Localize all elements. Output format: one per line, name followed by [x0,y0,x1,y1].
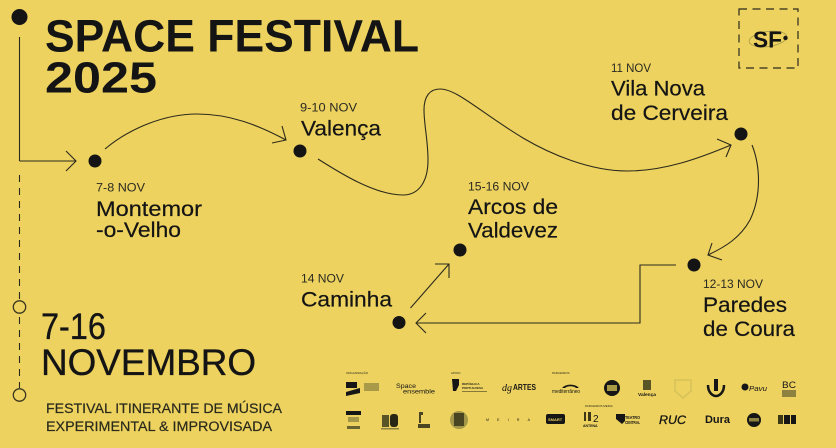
sponsor logos: SMART [548,417,563,422]
arrow: Cerveira to Paredes de Coura [708,145,758,260]
sponsor logos: mediterrâneo [552,389,580,395]
sponsor logos: ANTENA [583,424,598,428]
arrow: Caminha to Arcos [410,264,449,308]
stop: Valença [294,100,381,158]
stop: Arcos de Valdevez: Valdevez [468,220,558,242]
stop: Montemor-o-Velho: -o-Velho [96,219,181,242]
sponsor logos: PARCEIROS MEDIA [585,404,613,408]
stop: Vila Nova de Cerveira: Vila Nova [611,78,705,100]
stop: Paredes de Coura: Paredes [703,294,787,317]
stop: Caminha [301,272,406,329]
stop: Valença: Valença [301,118,381,140]
sponsor logos: Space [396,383,416,390]
stop: Arcos de Valdevez: Arcos de [468,196,558,219]
title [45,10,419,102]
sponsor logos: Pavu [749,386,767,393]
sponsor logos: ORGANIZAÇÃO [346,370,369,375]
sponsor logos: MEIRA [486,418,531,422]
stop: Caminha: Caminha [301,288,392,312]
stop: Montemor-o-Velho: Montemor [96,198,202,221]
stop: Montemor-o-Velho: 7-8 NOV [96,180,145,194]
sponsor logos: dg [502,383,512,394]
sponsor logos: REPÚBLICA [462,381,480,386]
dates heading: NOVEMBRO [41,342,256,383]
stop: Paredes de Coura: de Coura [703,318,795,341]
sponsor logos: Valença [638,392,657,397]
sponsor logos: BC [782,380,797,390]
stop: Paredes de Coura: 12-13 NOV [703,277,763,291]
dates heading: 7-16 [41,306,106,347]
subtitle: EXPERIMENTAL & IMPROVISADA [46,419,272,434]
title: 2025 [45,54,157,102]
timeline rail [12,9,28,401]
stop: Vila Nova de Cerveira [611,61,748,140]
stop: Vila Nova de Cerveira: de Cerveira [611,102,728,125]
title: SPACE FESTIVAL [45,10,419,62]
arrow: Paredes to Caminha [416,265,676,333]
subtitle: FESTIVAL ITINERANTE DE MÚSICA [46,401,282,416]
sponsor logos: TEATRO [625,415,640,420]
dates heading [41,306,256,383]
sponsor logos: CENTRAL [625,420,640,425]
sponsor logos [346,370,797,430]
logo: SF [739,9,798,68]
sponsor logos: ARTES [513,383,537,392]
stop: Caminha: 14 NOV [301,272,344,286]
stop: Arcos de Valdevez: 15-16 NOV [468,180,529,194]
stop: Valença: 9-10 NOV [300,100,357,114]
sponsor logos: Dura [705,414,731,426]
stop: Paredes de Coura [688,258,795,341]
arrow: into first stop [20,151,76,171]
sponsor logos: 2 [593,414,599,425]
stop: Arcos de Valdevez [454,180,558,256]
stop: Montemor-o-Velho [88,154,202,242]
logo: SF: SF [753,26,782,52]
arrow: Montemor to Valença [105,114,286,149]
sponsor logos: APOIO [451,371,461,375]
arrow: Valença to Vila Nova de Cerveira [318,89,731,195]
sponsor logos: ensemble [403,388,435,396]
sponsor logos: PARCEIROS [552,371,569,375]
sponsor logos: PORTUGUESA [462,386,484,390]
sponsor logos: RUC [659,413,686,427]
stop: Vila Nova de Cerveira: 11 NOV [611,61,651,75]
subtitle [46,401,282,434]
